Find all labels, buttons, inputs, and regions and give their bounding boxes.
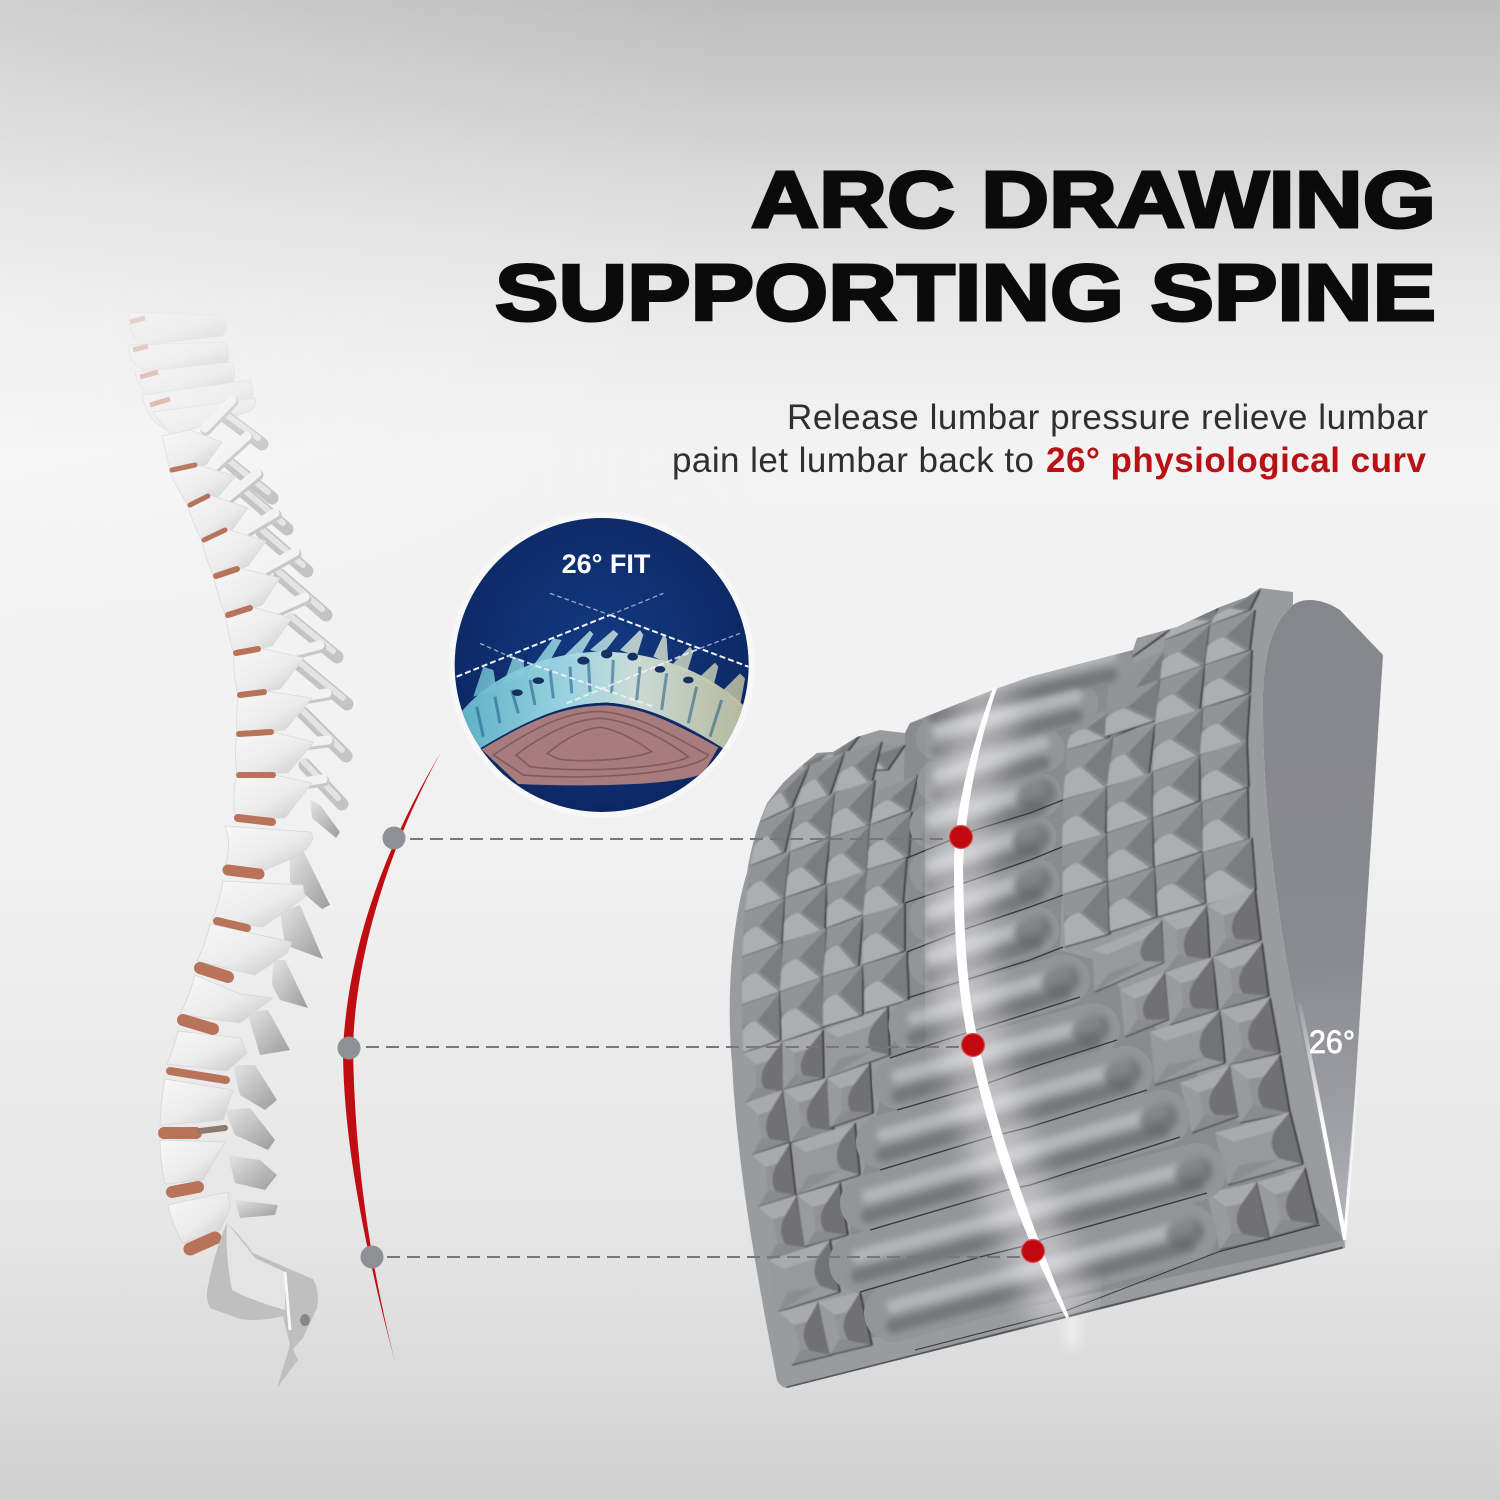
- inset: vertebra gaps: [477, 660, 722, 737]
- inset: dashed angle lines: [457, 615, 748, 707]
- spine: thoracic spinous processes: [220, 410, 347, 804]
- product: row separator lines: [787, 800, 1343, 1388]
- grey marker middle: [338, 1036, 360, 1060]
- product: white center arc: [954, 688, 1069, 1318]
- grey marker top: [382, 826, 406, 850]
- product: bar end shading: [1026, 793, 1199, 1235]
- subtitle text: [672, 398, 1428, 480]
- inset: heading: 26° FIT: [562, 549, 651, 579]
- spine: thoracic vertebral bodies: [162, 430, 314, 818]
- spine: upper faded vertebrae: [129, 312, 256, 436]
- inset: contour rings: [493, 712, 708, 777]
- product: long massage bars: [858, 655, 1199, 1326]
- product: left pyramid cells: [742, 735, 918, 1365]
- product: front body: [730, 588, 1345, 1388]
- product: angle label: 26°: [1309, 1024, 1355, 1060]
- spine: intervertebral discs: [164, 465, 273, 1249]
- dashed connector: top: [410, 838, 950, 840]
- red marker middle: [962, 1034, 984, 1056]
- grey marker bottom: [360, 1246, 384, 1268]
- dashed connector: middle: [366, 1046, 960, 1048]
- inset: vertebra foramina: [512, 650, 694, 696]
- inset artwork: [454, 518, 749, 812]
- spine: sacrum: [207, 1223, 318, 1388]
- spine: lumbar vertebral bodies: [160, 826, 312, 1243]
- dashed connector: bottom: [387, 1256, 1020, 1258]
- spine: pale upper discs: [130, 318, 170, 405]
- red marker top: [950, 826, 972, 848]
- red marker bottom: [1022, 1240, 1044, 1262]
- product: lumbar support: [730, 588, 1383, 1388]
- inset: spine body: [460, 652, 745, 748]
- product: surface details: [742, 590, 1345, 1388]
- inset: brown support shape: [475, 703, 723, 785]
- product: angle lines: [1297, 1000, 1360, 1240]
- red arc: [343, 752, 441, 1362]
- product: right pyramid cells: [1062, 590, 1318, 1250]
- product: stripe glow: [958, 688, 1068, 1317]
- product: side face: [1263, 600, 1383, 1248]
- inset: vertebra spikes: [473, 630, 745, 707]
- subtitle text: pain let lumbar back to: [672, 441, 1034, 480]
- spine illustration: [129, 312, 347, 1388]
- spine: lumbar lobes: [225, 800, 340, 1218]
- product: stripe base glow: [1065, 1310, 1079, 1350]
- title: ARC DRAWING: [751, 155, 1436, 244]
- subtitle text: Release lumbar pressure relieve lumbar: [787, 398, 1428, 437]
- product: bar row base: [850, 650, 1345, 1340]
- title: SUPPORTING SPINE: [495, 248, 1436, 337]
- subtitle text: 26° physiological curv: [1046, 441, 1427, 480]
- spine: thoracic transverse processes: [205, 400, 329, 788]
- title: [495, 155, 1436, 337]
- inset circle: 26 degree fit: [454, 518, 749, 812]
